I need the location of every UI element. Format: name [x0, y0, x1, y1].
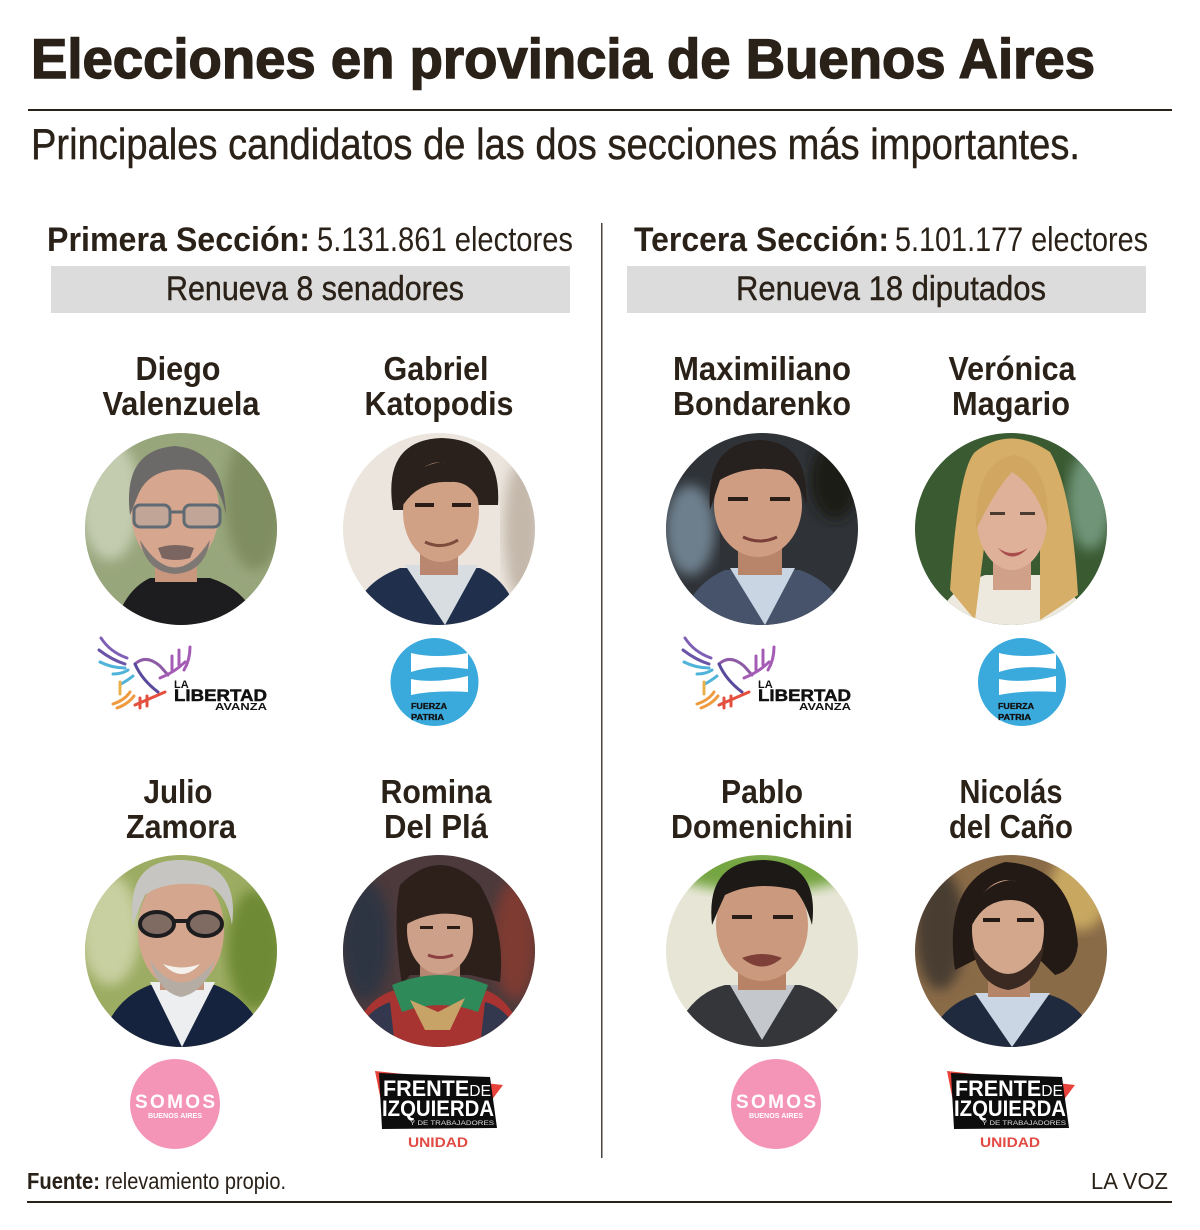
name: Del Plá	[384, 808, 489, 845]
name: Romina	[380, 773, 492, 810]
name	[380, 773, 492, 845]
panel: Primera Sección	[47, 221, 573, 1150]
photo: Julio Zamora	[80, 855, 283, 1047]
logo: Fuerza Patria: FUERZA	[411, 702, 447, 711]
candidate: Verónica Magario	[915, 350, 1112, 726]
name	[102, 350, 260, 422]
candidate: Romina Del Plá	[340, 773, 537, 1150]
logo: La Libertad Avanza: LIBERTAD	[174, 686, 267, 705]
section heading: Tercera Sección: 5.101.177 electores	[895, 221, 1148, 259]
name: Zamora	[126, 808, 237, 845]
logo: Fuerza Patria	[390, 638, 478, 726]
photo: Gabriel Katopodis	[343, 433, 540, 625]
header rule	[28, 109, 1172, 111]
banner: Renueva 8 senadores: Renueva 8 senadores	[166, 270, 464, 308]
source note	[27, 1168, 286, 1194]
name: Verónica	[948, 350, 1076, 387]
name: Diego	[136, 350, 220, 387]
logo: Frente de Izquierda: Y DE TRABAJADORES	[410, 1121, 494, 1127]
candidate: Julio Zamora	[80, 773, 283, 1149]
logo: La Libertad Avanza	[99, 638, 267, 713]
logo: Somos Buenos Aires: SOMOS	[135, 1092, 215, 1113]
name: Julio	[144, 773, 212, 810]
logo: Fuerza Patria: PATRIA	[998, 713, 1031, 722]
source note: Fuente:	[27, 1168, 100, 1194]
logo: Somos Buenos Aires: SOMOS	[736, 1092, 816, 1113]
name: Pablo	[721, 773, 803, 810]
section heading: Tercera Sección	[634, 221, 1148, 259]
logo: La Libertad Avanza: LA	[174, 679, 189, 691]
section heading: Tercera Sección: Tercera Sección:	[634, 221, 889, 259]
logo: La Libertad Avanza: LIBERTAD	[758, 686, 851, 705]
name	[364, 350, 514, 422]
name	[949, 773, 1073, 845]
candidate: Diego Valenzuela	[80, 350, 285, 713]
logo: Frente de Izquierda: FRENTEDE	[955, 1076, 1063, 1101]
logo: Frente de Izquierda: Y DE TRABAJADORES	[982, 1121, 1066, 1127]
logo: Frente de Izquierda: IZQUIERDA	[382, 1096, 494, 1121]
name: Valenzuela	[102, 385, 260, 422]
logo: Frente de Izquierda: IZQUIERDA	[954, 1096, 1066, 1121]
name	[671, 773, 853, 845]
name	[948, 350, 1076, 422]
photo: Maximiliano Bondarenko	[665, 433, 860, 625]
name	[673, 350, 851, 422]
logo: Frente de Izquierda: UNIDAD	[408, 1134, 468, 1150]
name: Nicolás	[960, 773, 1062, 810]
photo: Nicolás del Caño	[915, 850, 1110, 1047]
name: Bondarenko	[673, 385, 851, 422]
banner: Renueva 8 senadores	[51, 266, 570, 313]
candidate: Pablo Domenichini	[666, 773, 858, 1149]
credit: La Voz: LA VOZ	[1091, 1168, 1168, 1194]
logo: Somos Buenos Aires	[130, 1059, 220, 1149]
logo: Somos Buenos Aires	[731, 1059, 821, 1149]
name: Maximiliano	[673, 350, 851, 387]
logo: La Libertad Avanza	[683, 638, 851, 713]
source note: relevamiento propio.	[105, 1168, 286, 1194]
logo: La Libertad Avanza: AVANZA	[799, 702, 851, 713]
name	[126, 773, 237, 845]
logo: Frente de Izquierda: FRENTEDE	[383, 1076, 491, 1101]
name: Domenichini	[671, 808, 853, 845]
photo: Diego Valenzuela	[80, 430, 285, 625]
photo: Verónica Magario	[915, 433, 1112, 625]
section heading: Primera Sección: 5.131.861 electores	[317, 221, 573, 259]
section heading: Primera Sección	[47, 221, 573, 259]
banner: Renueva 18 diputados: Renueva 18 diputados	[736, 270, 1046, 308]
footer rule	[27, 1201, 1172, 1203]
logo: Fuerza Patria	[978, 638, 1066, 726]
photo: Pablo Domenichini	[666, 848, 858, 1047]
banner: Renueva 18 diputados	[627, 266, 1146, 313]
logo: Somos Buenos Aires: BUENOS AIRES	[148, 1113, 202, 1120]
section heading: Primera Sección: Primera Sección:	[47, 221, 310, 259]
candidate: Gabriel Katopodis	[343, 350, 540, 726]
name: Katopodis	[364, 385, 514, 422]
logo: Frente de Izquierda	[947, 1071, 1075, 1150]
title: Elecciones en provincia de Buenos Aires	[31, 27, 1095, 90]
logo: Somos Buenos Aires: BUENOS AIRES	[749, 1113, 803, 1120]
column divider	[601, 223, 602, 1158]
logo: Frente de Izquierda: UNIDAD	[980, 1134, 1040, 1150]
logo: La Libertad Avanza: LA	[758, 679, 773, 691]
candidate: Maximiliano Bondarenko	[665, 350, 860, 713]
candidate: Nicolás del Caño	[915, 773, 1110, 1150]
panel: Tercera Sección	[627, 221, 1148, 1150]
logo: Fuerza Patria: PATRIA	[411, 713, 444, 722]
photo: Romina Del Plá	[340, 855, 537, 1047]
name: Gabriel	[384, 350, 488, 387]
logo: Frente de Izquierda	[375, 1071, 503, 1150]
name: del Caño	[949, 808, 1073, 845]
logo: Fuerza Patria: FUERZA	[998, 702, 1034, 711]
name: Magario	[952, 385, 1070, 422]
logo: La Libertad Avanza: AVANZA	[215, 702, 267, 713]
